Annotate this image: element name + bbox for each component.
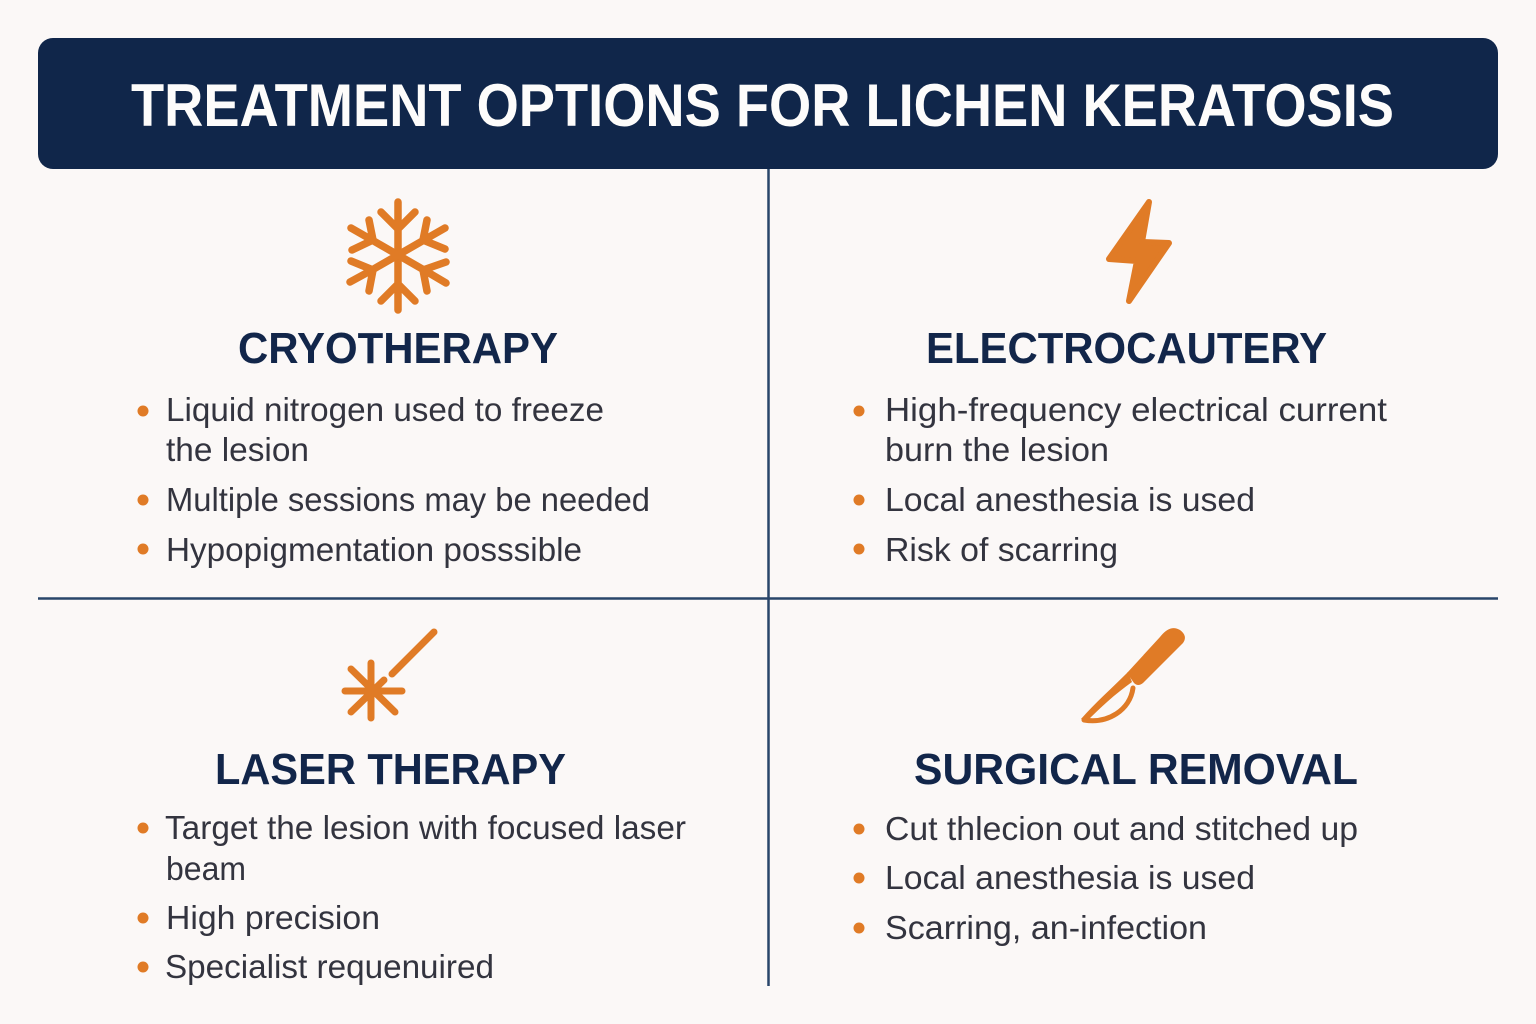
icon: scalpel — [1081, 628, 1185, 721]
bullet list: electrocautery: Risk of scarring — [885, 531, 1118, 568]
bullet list: cryotherapy: Multiple sessions may be needed — [166, 481, 650, 518]
heading: surgical removal: SURGICAL REMOVAL — [914, 745, 1358, 794]
icon: lightning bolt — [1109, 202, 1169, 301]
icon: snowflake — [350, 202, 446, 310]
bullet list: cryotherapy: Hypopigmentation posssible — [166, 531, 582, 568]
heading: laser therapy: LASER THERAPY — [215, 745, 566, 794]
bullet list: surgical removal — [854, 810, 1358, 946]
panel: electrocautery — [854, 202, 1387, 568]
title banner: TREATMENT OPTIONS FOR LICHEN KERATOSIS — [131, 72, 1394, 139]
panel: laser therapy — [138, 632, 686, 985]
bullet list: laser therapy: Target the lesion with focused laser — [165, 809, 686, 846]
bullet list: cryotherapy: the lesion — [166, 431, 309, 468]
bullet list: electrocautery: High-frequency electrical current — [885, 391, 1387, 428]
heading: cryotherapy: CRYOTHERAPY — [238, 324, 558, 373]
panel: surgical removal — [854, 628, 1358, 946]
heading: electrocautery: ELECTROCAUTERY — [926, 324, 1327, 373]
bullet list: surgical removal: Cut thlecion out and stitched up — [885, 810, 1358, 847]
bullet list: surgical removal: Scarring, an-infection — [885, 909, 1207, 946]
icon: laser — [345, 632, 434, 718]
bullet list: surgical removal: Local anesthesia is used — [885, 859, 1255, 896]
title banner — [38, 38, 1498, 169]
bullet list: laser therapy: beam — [166, 850, 246, 887]
bullet list: electrocautery: Local anesthesia is used — [885, 481, 1255, 518]
bullet list: cryotherapy — [138, 391, 650, 568]
bullet list: laser therapy — [138, 809, 686, 985]
bullet list: laser therapy: Specialist requenuired — [165, 948, 494, 985]
bullet list: electrocautery — [854, 391, 1387, 568]
bullet list: electrocautery: burn the lesion — [885, 431, 1109, 468]
bullet list: laser therapy: High precision — [166, 899, 380, 936]
panel: cryotherapy — [138, 202, 650, 568]
bullet list: cryotherapy: Liquid nitrogen used to freeze — [166, 391, 604, 428]
